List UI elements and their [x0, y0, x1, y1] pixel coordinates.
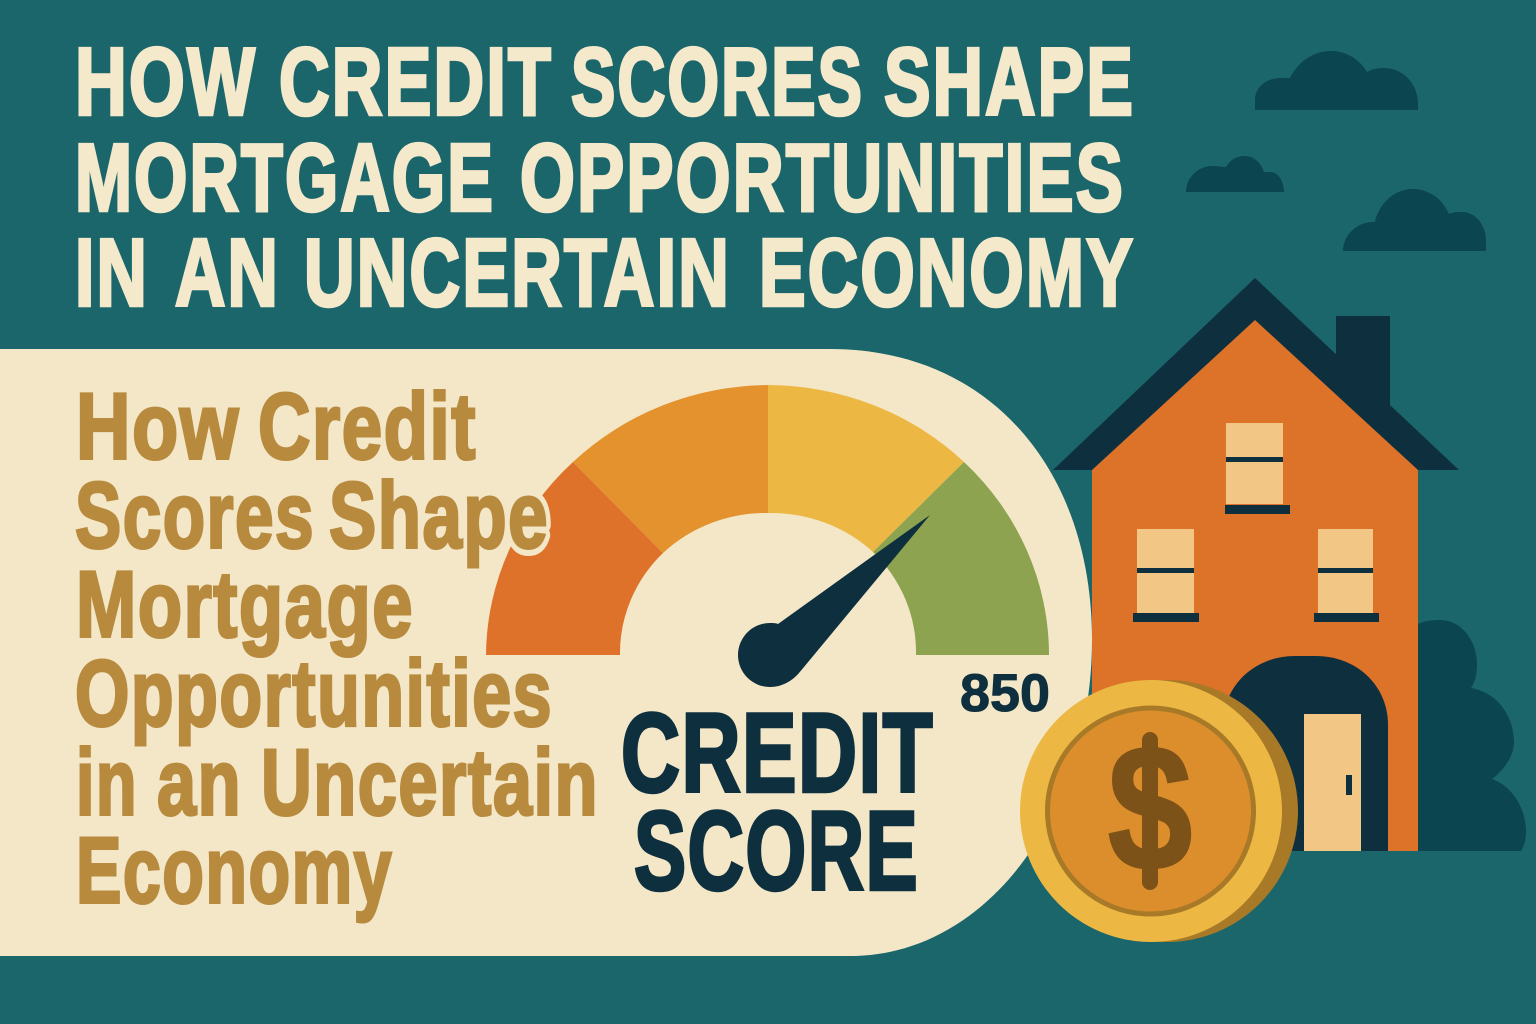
door	[1304, 714, 1361, 851]
title: ECONOMY	[759, 220, 1135, 326]
subtitle text block: Shape	[329, 462, 549, 568]
title: OPPORTUNITIES	[520, 124, 1125, 232]
title: SHAPE	[884, 28, 1135, 136]
panel: cream background	[0, 349, 1092, 956]
coin edge	[1036, 680, 1298, 942]
gauge	[486, 385, 1049, 687]
subtitle text block: Opportunities	[75, 640, 553, 746]
dollar sign: $	[1108, 708, 1192, 909]
title: UNCERTAIN	[304, 220, 731, 326]
gauge segment: orange	[573, 385, 768, 553]
window: right	[1314, 529, 1379, 622]
gauge segment: red-orange	[486, 462, 663, 655]
subtitle text block: How	[76, 374, 240, 478]
subtitle text block: in	[76, 730, 138, 834]
subtitle text block: an	[157, 730, 242, 834]
credit score label: CREDIT	[621, 690, 934, 816]
coin	[1020, 680, 1298, 942]
bushes	[1418, 620, 1526, 851]
clouds	[1186, 51, 1486, 251]
title: SCORES	[571, 28, 864, 136]
subtitle text block: Credit	[258, 374, 477, 478]
subtitle text block	[75, 374, 599, 922]
roof	[1053, 278, 1459, 470]
title	[75, 28, 1135, 326]
door arch	[1223, 656, 1388, 851]
subtitle text block: Scores	[75, 462, 315, 568]
gauge segment: yellow	[768, 385, 964, 552]
credit score label	[621, 690, 934, 914]
subtitle text block: Shape	[329, 462, 549, 568]
door handle	[1346, 775, 1352, 795]
chimney	[1336, 316, 1390, 426]
title: AN	[175, 220, 280, 326]
subtitle text block: Uncertain	[261, 730, 599, 834]
title: MORTGAGE	[75, 124, 495, 232]
title: HOW	[75, 28, 257, 136]
subtitle text block: Economy	[76, 818, 393, 922]
title: CREDIT	[279, 28, 553, 136]
gauge segment: green	[873, 462, 1049, 655]
window: top	[1225, 423, 1290, 514]
coin face	[1020, 680, 1282, 942]
needle	[738, 515, 930, 687]
coin inner disc	[1048, 708, 1254, 914]
house	[1053, 278, 1459, 851]
title: IN	[75, 220, 149, 326]
credit score label: SCORE	[634, 788, 919, 914]
subtitle text block: Mortgage	[76, 552, 414, 656]
window: left	[1133, 529, 1199, 622]
house body	[1092, 320, 1418, 851]
gauge label: 850: 850	[960, 664, 1050, 723]
